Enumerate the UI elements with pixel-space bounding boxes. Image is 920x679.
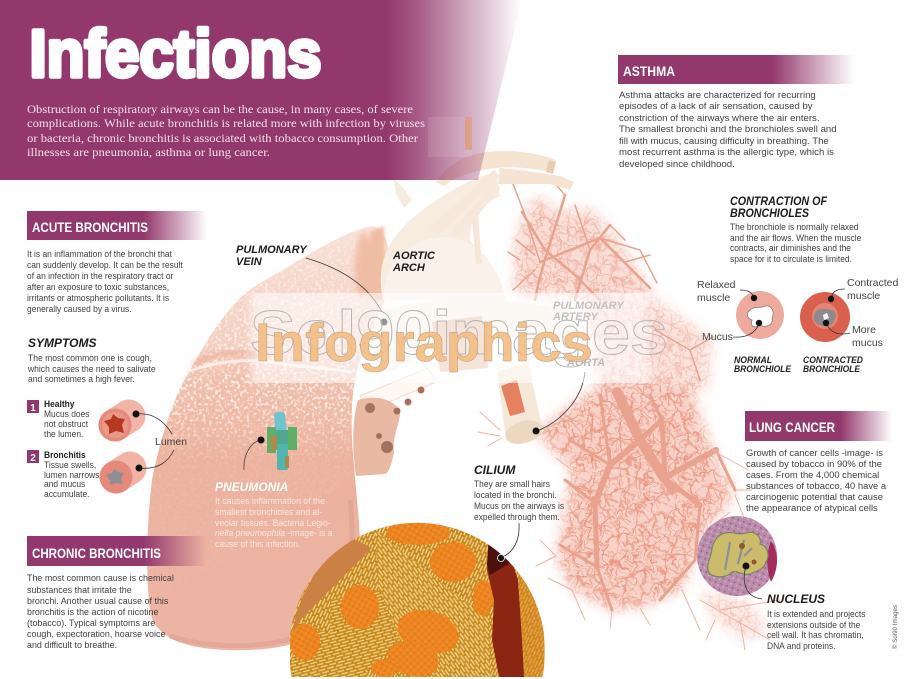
text: chronic bronchitis description <box>27 573 174 650</box>
intro text: illnesses are pneumonia, asthma or lung cancer. <box>27 146 270 159</box>
label: pulmonary artery: ARTERY <box>552 311 599 323</box>
text: chronic bronchitis description: substances that irritate the <box>27 585 132 595</box>
text: bronchitis: Tissue swells, <box>44 460 96 470</box>
text: lung cancer description: Growth of cancer cells -image- is <box>746 448 883 459</box>
text: chronic bronchitis description: bronchi. Another usual cause of this <box>27 596 169 606</box>
heading: cilium: CILIUM <box>474 463 516 477</box>
text: pneumonia description: nella pneumophila -image- is a <box>215 528 333 538</box>
labels: bronchiole callouts: Contracted <box>847 277 899 289</box>
text: cilium description: They are small hairs <box>474 479 550 489</box>
text: asthma description: Asthma attacks are characterized for recurring <box>619 90 816 101</box>
text: chronic bronchitis description: and difficult to breathe. <box>27 640 117 650</box>
heading: acute bronchitis <box>27 211 207 240</box>
text: lung cancer description: the appearance of atypical cells <box>746 503 878 514</box>
cilium leader line <box>498 523 519 562</box>
label: aortic arch <box>392 250 436 274</box>
intro text: Obstruction of respiratory airways can be the cause, in many cases, of severe <box>27 103 413 116</box>
heading: lung cancer <box>745 411 892 441</box>
caption: contracted bronchiole: BRONCHIOLE <box>803 364 861 374</box>
text: cilium description: located in the bronchi. <box>474 490 557 500</box>
heading: chronic bronchitis <box>27 536 207 566</box>
badge: 1 healthy <box>27 400 39 414</box>
trachea seen through the header <box>428 117 472 157</box>
text: cilium description: expelled through them. <box>474 512 560 522</box>
text: healthy: the lumen. <box>44 429 83 439</box>
text: chronic bronchitis description: bronchitis is the action of nicotine <box>27 607 158 617</box>
text: healthy: Mucus does <box>44 409 90 419</box>
heading: nucleus: NUCLEUS <box>767 592 825 606</box>
label: aorta <box>532 357 605 434</box>
text: pneumonia description: smallest bronchioles and al- <box>215 507 322 517</box>
watermark <box>245 293 668 383</box>
labels: bronchiole callouts: Relaxed <box>697 279 736 291</box>
intro text: complications. While acute bronchitis is related more with infection by viruses <box>27 117 426 130</box>
text: contraction description: contracts, air diminishes and the <box>730 243 851 253</box>
heading: asthma: ASTHMA <box>623 63 675 79</box>
panel: nucleus <box>742 562 866 651</box>
label: pulmonary artery: PULMONARY <box>553 300 625 312</box>
heading: contraction of bronchioles: CONTRACTION OF <box>730 194 828 208</box>
panel: chronic bronchitis <box>27 536 207 650</box>
text: symptoms description: and sometimes a high fever. <box>28 374 135 384</box>
text: asthma description: fill with mucus, causing difficulty in breathing. The <box>619 136 829 147</box>
watermark: Infographics <box>255 313 593 373</box>
illustration: left lung <box>147 226 389 650</box>
label: pulmonary vein: PULMONARY <box>236 244 308 256</box>
labels: bronchiole callouts <box>697 277 899 349</box>
heading: contraction of bronchioles <box>730 194 828 220</box>
panel: lung cancer <box>745 411 892 514</box>
illustration: trachea and heart vessels <box>353 151 578 476</box>
diagram: normal bronchiole <box>736 291 784 339</box>
panel: asthma <box>618 55 854 170</box>
text: asthma description: constriction of the airways where the air enters. <box>619 113 820 124</box>
text: symptoms description: The most common one is cough, <box>28 353 152 363</box>
heading: pneumonia: PNEUMONIA <box>215 480 288 494</box>
text: chronic bronchitis description: (tobacco). Typical symptoms are <box>27 618 155 628</box>
badge: 2 bronchitis <box>27 450 39 464</box>
text: pneumonia description: It causes inflammation of the <box>215 496 325 506</box>
label: aortic arch: ARCH <box>392 262 426 274</box>
text: bronchitis: Bronchitis <box>44 450 86 460</box>
label: pulmonary artery <box>552 300 625 323</box>
caption: normal bronchiole: BRONCHIOLE <box>734 364 792 374</box>
text: lung cancer description: substances of tobacco, 40 have a <box>746 481 887 492</box>
caption: contracted bronchiole <box>803 355 863 374</box>
text: acute bronchitis description: after an exposure to toxic substances, <box>27 282 169 292</box>
text: asthma description: The smallest bronchi and the bronchioles swell and <box>619 124 837 135</box>
text: lung cancer description: caused by tobacco in 90% of the <box>746 459 882 470</box>
text: acute bronchitis description: It is an inflammation of the bronchi that <box>27 249 172 259</box>
text: nucleus description: It is extended and projects <box>767 609 866 619</box>
label: aortic arch: AORTIC <box>392 250 436 262</box>
text: acute bronchitis description: generally caused by a virus. <box>27 304 132 314</box>
text: acute bronchitis description: can suddenly develop. It can be the result <box>27 260 183 270</box>
labels: bronchiole callouts: Mucus <box>702 331 733 343</box>
text: cilium description <box>474 479 564 522</box>
labels: bronchiole callouts: muscle <box>847 290 880 302</box>
image: cancer cell <box>697 516 777 596</box>
panel: cilium <box>474 463 564 562</box>
text: acute bronchitis description <box>27 249 183 314</box>
text: nucleus description: DNA and proteins. <box>767 641 835 651</box>
panel: contraction of bronchioles <box>697 194 899 374</box>
text: asthma description: developed since childhood. <box>619 159 735 170</box>
text: chronic bronchitis description: cough, expectoration, hoarse voice <box>27 629 165 639</box>
heading: chronic bronchitis: CHRONIC BRONCHITIS <box>32 545 161 561</box>
nucleus leader line <box>742 562 762 599</box>
text: asthma description: episodes of a lack of air sensation, caused by <box>619 101 813 112</box>
text: nucleus description: extensions outside of the <box>767 620 860 630</box>
text: pneumonia description <box>215 496 333 549</box>
text: asthma description: most recurrent asthma is the allergic type, which is <box>619 147 834 158</box>
text: asthma description <box>619 90 837 170</box>
text: bronchitis: lumen narrows <box>44 470 100 480</box>
lumen callout <box>132 410 187 472</box>
text: contraction description: and the air flows. When the muscle <box>730 233 861 243</box>
text: nucleus description: cell wall. It has chromatin, <box>767 630 864 640</box>
text: nucleus description <box>767 609 866 651</box>
labels: bronchiole callouts: More <box>852 324 876 336</box>
text: symptoms description: which causes the need to salivate <box>27 364 156 374</box>
icon: healthy bronchus cylinder <box>98 408 132 442</box>
labels: bronchiole callouts: muscle <box>697 292 730 304</box>
label: aorta: AORTA <box>566 357 605 369</box>
heading: contraction of bronchioles: BRONCHIOLES <box>730 206 809 220</box>
heading: symptoms: SYMPTOMS <box>28 336 96 350</box>
text: lung cancer description: carcinogenic potential that cause <box>746 492 883 503</box>
badge: 1 healthy: 1 <box>30 403 36 414</box>
text: healthy <box>44 399 90 439</box>
heading: acute bronchitis: ACUTE BRONCHITIS <box>32 219 148 235</box>
text: pneumonia description: veolar tissues. Bacteria Legio- <box>215 518 331 528</box>
text: healthy: not obstruct <box>44 419 89 429</box>
label: pulmonary vein: VEIN <box>236 256 263 268</box>
heading: lung cancer: LUNG CANCER <box>749 419 835 435</box>
text: pneumonia description: cause of this infection. <box>215 539 300 549</box>
watermark: Sol90images <box>250 299 668 368</box>
icon: pneumonia bacteria <box>267 411 297 470</box>
diagram: contracted bronchiole <box>800 292 850 342</box>
text: contraction description: space for it to circulate is limited. <box>730 254 852 264</box>
caption: normal bronchiole <box>734 355 792 374</box>
illustration: aorta cross-section tube <box>497 362 545 448</box>
header panel <box>0 0 522 180</box>
text: bronchitis: and mucus <box>44 479 86 489</box>
intro text: or bacteria, chronic bronchitis is associated with tobacco consumption. Other <box>27 132 418 145</box>
pneumonia leader line <box>244 436 264 470</box>
caption: contracted bronchiole: CONTRACTED <box>803 355 863 365</box>
illustration: right lung bronchial tree <box>478 170 790 650</box>
text: acute bronchitis description: irritants or atmospheric pollutants. It is <box>27 293 170 303</box>
text: contraction description <box>730 222 861 264</box>
lumen callout: Lumen <box>155 436 187 448</box>
text: contraction description: The bronchiole is normally relaxed <box>730 222 859 232</box>
label: pulmonary vein <box>236 244 388 326</box>
intro text <box>27 103 426 159</box>
title: Infections <box>30 16 322 92</box>
labels: bronchiole callouts: mucus <box>852 337 883 349</box>
text: healthy: Healthy <box>44 399 74 409</box>
panel: pneumonia <box>215 436 333 549</box>
text: lung cancer description <box>746 448 887 514</box>
icon: bronchitis cylinder <box>100 460 132 494</box>
text: lung cancer description: cases. From the 4,000 chemical <box>746 470 879 481</box>
panel: acute bronchitis <box>27 211 207 314</box>
text: bronchitis <box>44 450 100 499</box>
text: cilium description: Mucus on the airways is <box>474 501 564 511</box>
caption: normal bronchiole: NORMAL <box>734 355 772 365</box>
text: symptoms description <box>27 353 156 384</box>
panel: symptoms <box>27 336 187 499</box>
image: cilium micrograph <box>290 521 545 679</box>
text: bronchitis: accumulate. <box>44 489 90 499</box>
badge: 2 bronchitis: 2 <box>30 453 36 464</box>
text: chronic bronchitis description: The most common cause is chemical <box>27 573 174 583</box>
credit: © Sol90 Images <box>892 605 899 649</box>
heading: asthma <box>618 55 854 84</box>
text: acute bronchitis description: of an infection in the respiratory tract or <box>27 271 173 281</box>
